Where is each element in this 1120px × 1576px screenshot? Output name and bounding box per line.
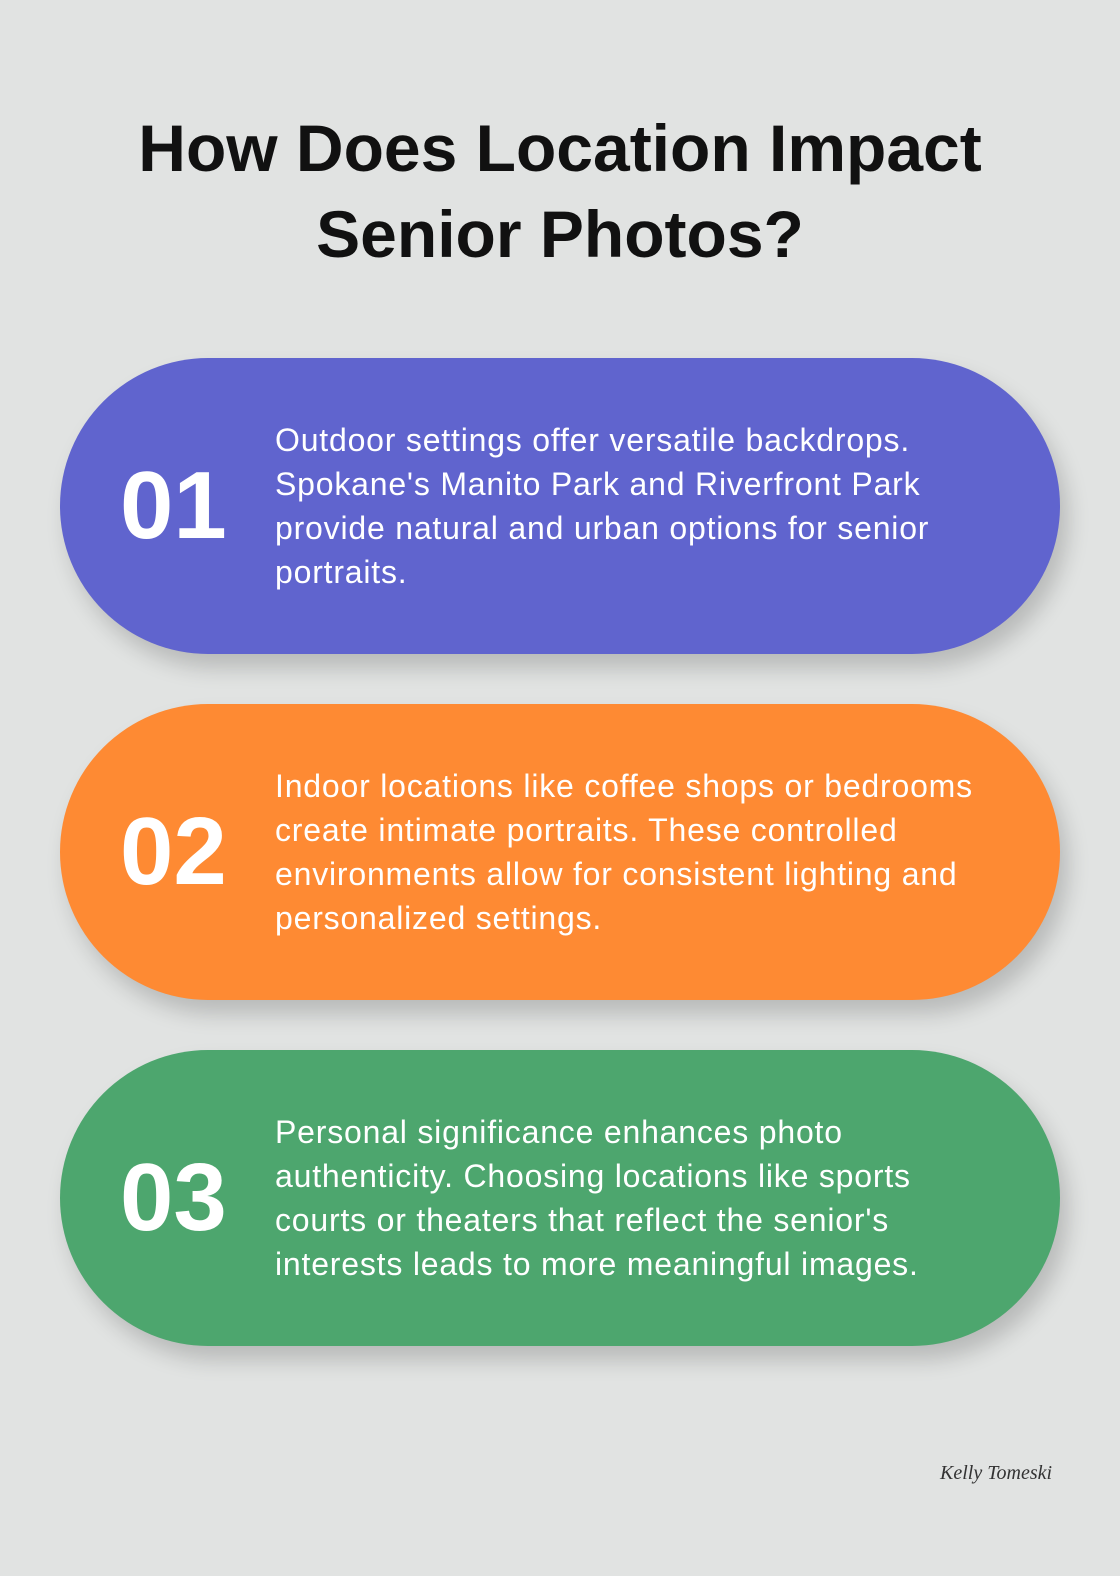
number 01: 01 [120,452,227,559]
text 01: Spokane's Manito Park and Riverfront Park [275,466,920,502]
text 01: portraits. [275,554,407,590]
title: Senior Photos? [316,197,804,271]
text 03: Personal significance enhances photo [275,1114,843,1150]
text 02: personalized settings. [275,900,602,936]
text 03: interests leads to more meaningful images. [275,1246,919,1282]
title [138,111,982,271]
panel: 02 indoor [60,704,1060,1000]
panel: 01 outdoor [60,358,1060,654]
text 02: create intimate portraits. These controlled [275,812,898,848]
text 03: courts or theaters that reflect the senior's [275,1202,889,1238]
signature logo: Kelly Tomeski [940,1462,1052,1484]
text 02 [275,768,973,936]
number 03: 03 [120,1144,227,1251]
text 01: provide natural and urban options for senior [275,510,929,546]
number 02: 02 [120,798,227,905]
panel: 03 personal [60,1050,1060,1346]
text 02: Indoor locations like coffee shops or bedrooms [275,768,973,804]
text 01: Outdoor settings offer versatile backdrops. [275,422,910,458]
title: How Does Location Impact [138,111,982,185]
text 02: environments allow for consistent lighting and [275,856,958,892]
text 03: authenticity. Choosing locations like sports [275,1158,911,1194]
text 01 [275,422,929,590]
text 03 [275,1114,919,1282]
